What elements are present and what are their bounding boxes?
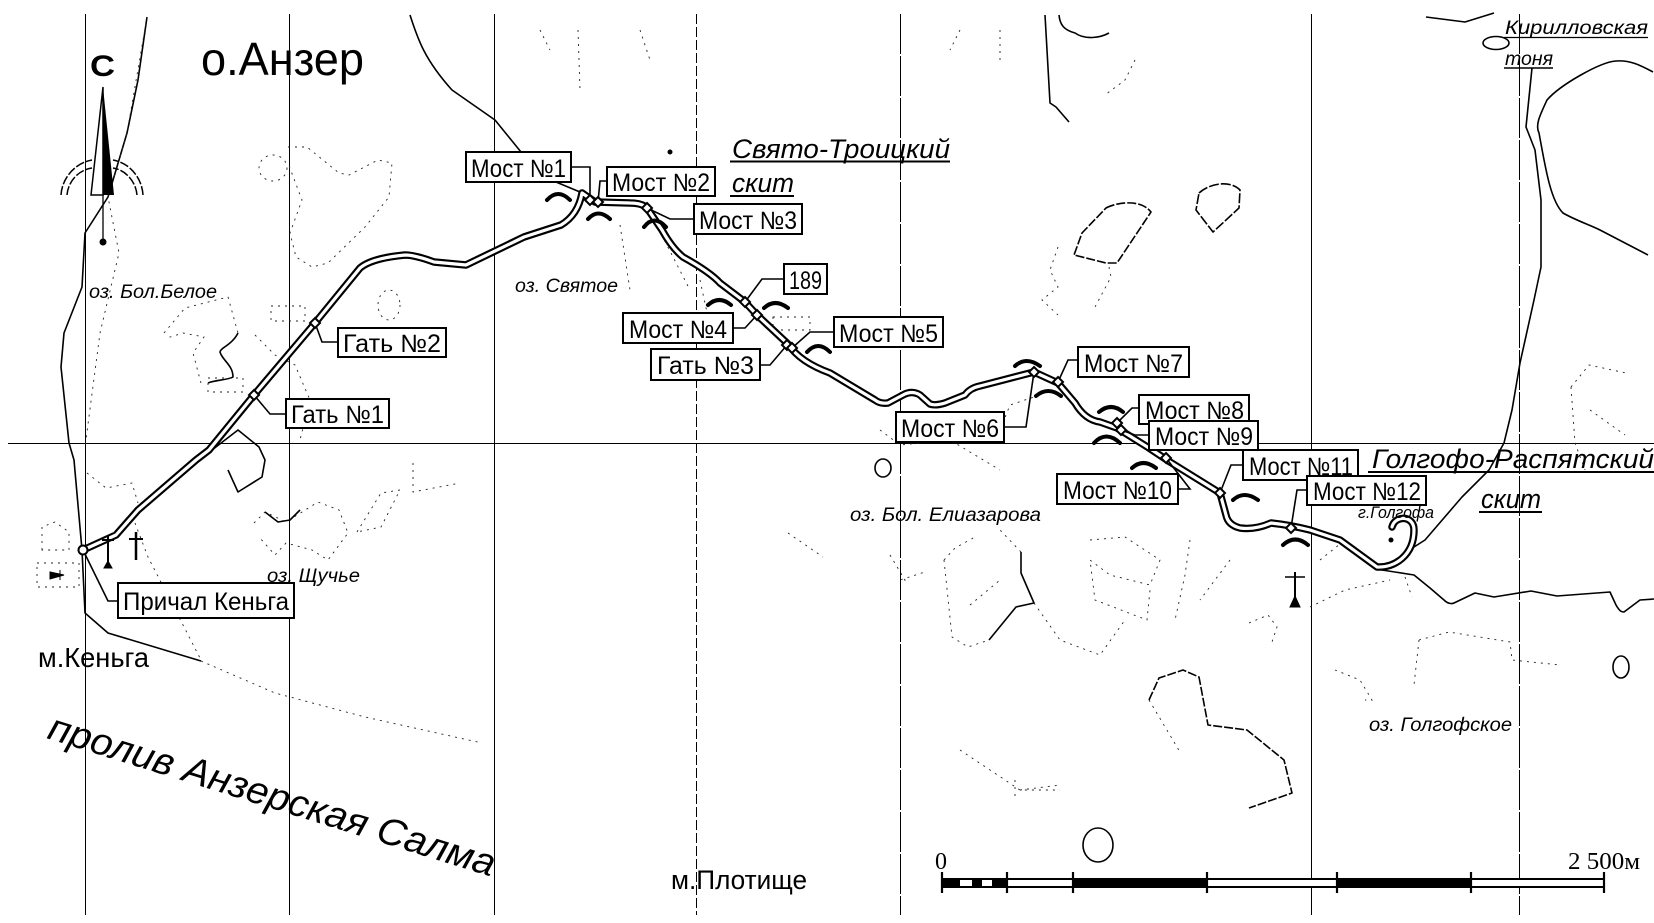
label boxes bbox=[118, 152, 1426, 618]
box: Мост №6: Мост №6 bbox=[901, 415, 999, 443]
box: Гать №2: Гать №2 bbox=[343, 330, 441, 358]
scale end: 2 500м bbox=[1568, 849, 1640, 875]
strait label: пролив Анзерская Салма bbox=[43, 706, 501, 885]
dashed causeway marks bbox=[208, 306, 810, 392]
box: Мост №5: Мост №5 bbox=[839, 320, 938, 348]
icon: cross Кеньга 2 bbox=[129, 532, 143, 560]
cape label: м.Плотище: м.Плотище bbox=[671, 865, 807, 895]
lake labels bbox=[89, 276, 1512, 736]
lake labels: г.Голгофа bbox=[1358, 503, 1434, 522]
box: Мост №4: Мост №4 bbox=[629, 316, 727, 344]
box: Причал Кеньга: Причал Кеньга bbox=[123, 588, 289, 616]
lake labels: оз. Святое bbox=[515, 276, 618, 297]
label: Голгофо-Распятский скит: скит bbox=[1481, 484, 1541, 514]
shoreline dashed inner bbox=[85, 17, 147, 447]
label: Кирилловская тоня: Кирилловская bbox=[1505, 18, 1648, 39]
box: Мост №11: Мост №11 bbox=[1249, 453, 1353, 481]
box: Мост №3: Мост №3 bbox=[699, 207, 797, 235]
label: Кирилловская тоня: тоня bbox=[1505, 49, 1553, 70]
icon: cross Кеньга 1 bbox=[102, 535, 114, 568]
scale start: 0 bbox=[935, 849, 947, 875]
icon: cross Голгофа bbox=[1285, 572, 1305, 607]
box: Гать №1: Гать №1 bbox=[291, 401, 384, 429]
label: Свято-Троицкий скит: скит bbox=[732, 168, 794, 198]
box: Мост №10: Мост №10 bbox=[1063, 477, 1172, 505]
box: Мост №12: Мост №12 bbox=[1313, 478, 1421, 506]
icon: north arrow bbox=[61, 87, 143, 246]
bridge nodes bbox=[78, 195, 1296, 554]
shoreline south east bbox=[1382, 570, 1654, 612]
icon: Свято-Троицкий point bbox=[668, 150, 672, 154]
box: Мост №7: Мост №7 bbox=[1084, 350, 1183, 378]
label: Свято-Троицкий скит: Свято-Троицкий bbox=[732, 134, 950, 164]
icon: Голгофа point bbox=[1388, 538, 1394, 542]
cape label: м.Кеньга: м.Кеньга bbox=[38, 642, 149, 673]
label: Голгофо-Распятский скит bbox=[1368, 444, 1654, 514]
icon: building outline bbox=[42, 522, 69, 550]
box: Мост №8: Мост №8 bbox=[1145, 397, 1244, 425]
label: Голгофо-Распятский скит: Голгофо-Распятский bbox=[1372, 444, 1654, 474]
label: Свято-Троицкий скит bbox=[730, 134, 950, 198]
north letter: С bbox=[90, 50, 115, 83]
lake labels: оз. Щучье bbox=[267, 566, 360, 587]
lake labels: оз. Бол. Елиазарова bbox=[850, 505, 1041, 526]
shoreline west bbox=[61, 17, 201, 661]
box: Мост №1: Мост №1 bbox=[471, 155, 566, 183]
box: Гать №3: Гать №3 bbox=[657, 352, 754, 380]
box: 189: 189 bbox=[789, 267, 822, 295]
bridge arc symbols bbox=[547, 194, 1308, 545]
box: Мост №2: Мост №2 bbox=[612, 169, 710, 197]
box: Мост №9: Мост №9 bbox=[1155, 423, 1253, 451]
label: Кирилловская тоня bbox=[1504, 18, 1648, 70]
leader lines bbox=[83, 167, 1307, 601]
route bbox=[83, 193, 1414, 567]
road to Кирилловская тоня bbox=[1414, 68, 1541, 547]
title: island name: о.Анзер bbox=[201, 33, 364, 85]
lake labels: оз. Бол.Белое bbox=[89, 282, 217, 303]
lake labels: оз. Голгофское bbox=[1369, 715, 1512, 736]
stream north bbox=[410, 15, 580, 192]
scale bar bbox=[935, 849, 1640, 893]
icon: dashed anchor yard bbox=[37, 563, 79, 587]
